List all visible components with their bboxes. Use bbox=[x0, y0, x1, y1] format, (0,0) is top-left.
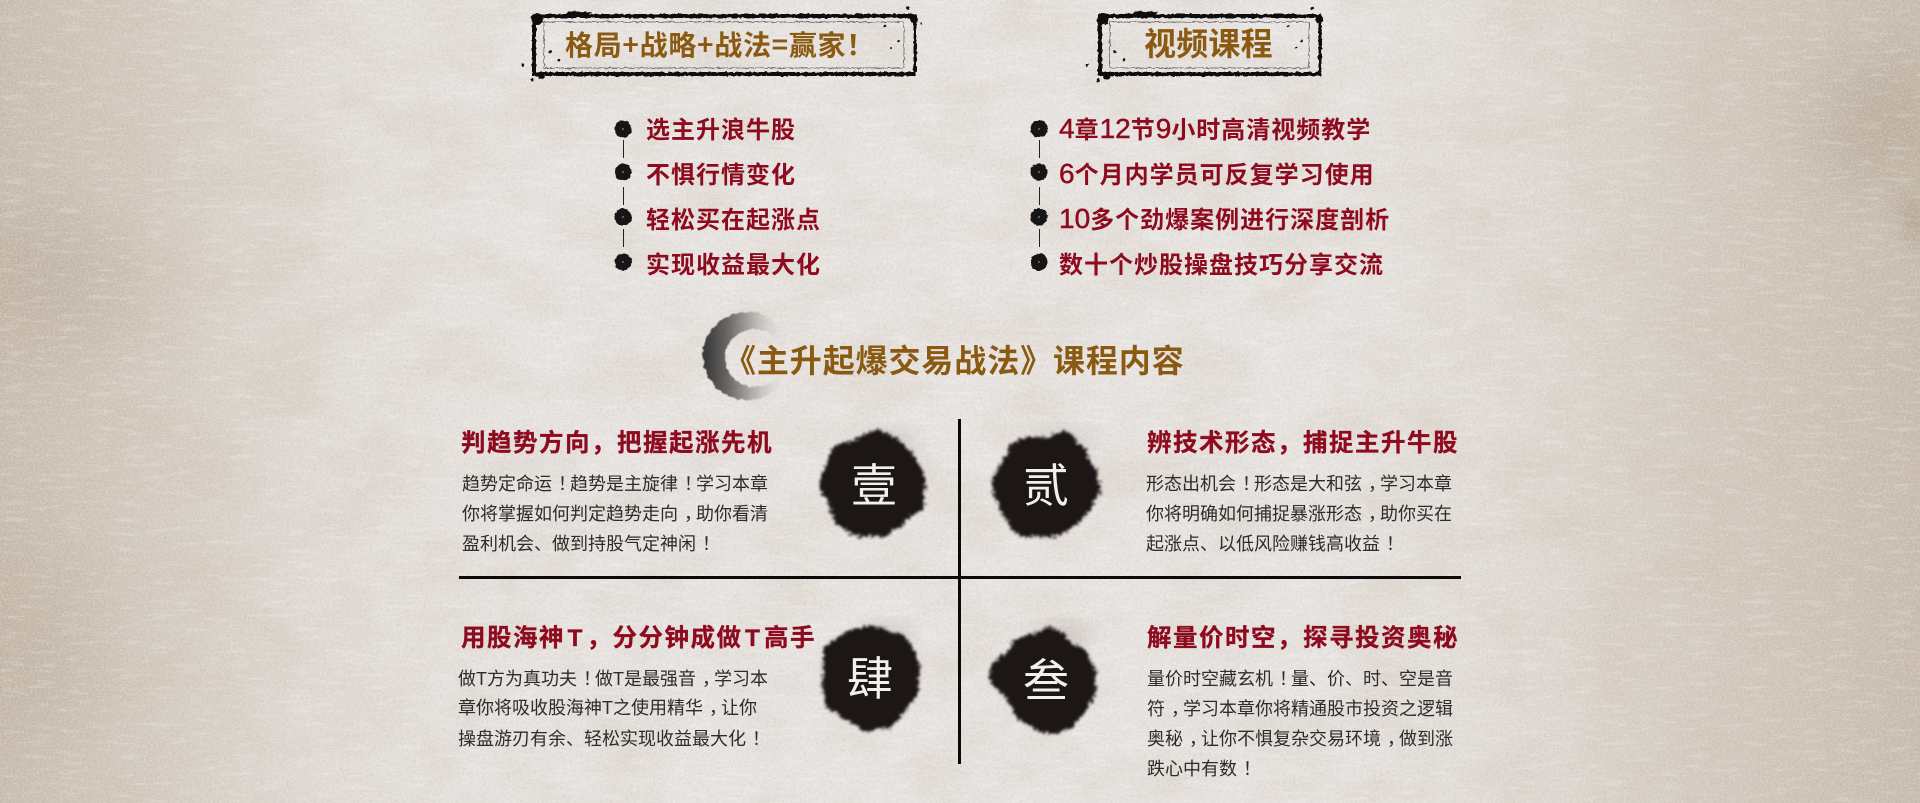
panel: chapter 3 bbox=[994, 624, 1459, 779]
panel: chapter 4: 章你将吸收股海神T之使用精华 ，让你 bbox=[458, 698, 757, 718]
panel: chapter 4: 用股海神T，分分钟成做T高手 bbox=[461, 624, 816, 652]
panel: chapter 3: 解量价时空，探寻投资奥秘 bbox=[1147, 624, 1459, 652]
frame heading: 格局+战略+战法=赢家: 格局+战略+战法=赢家！ bbox=[565, 24, 875, 64]
list: benefits: 选主升浪牛股 bbox=[646, 117, 796, 144]
icon: ink blob 壹: 壹 bbox=[851, 460, 897, 512]
list: benefits bbox=[614, 117, 821, 279]
list: video course: 4章12节9小时高清视频教学 bbox=[1059, 113, 1371, 144]
panel: chapter 2: 形态出机会 ！形态是大和弦 ，学习本章 bbox=[1146, 474, 1452, 494]
list: benefits: 实现收益最大化 bbox=[646, 252, 821, 279]
list: video course bbox=[1030, 113, 1390, 279]
panel: chapter 3: 奥秘 ，让你不惧复杂交易环境 ，做到涨 bbox=[1147, 729, 1453, 749]
panel: chapter 2: 辨技术形态，捕捉主升牛股 bbox=[1147, 429, 1459, 457]
section title: 《主升起爆交易战法》课程内容 bbox=[724, 336, 1185, 382]
list: benefits: 不惧行情变化 bbox=[646, 161, 796, 189]
panel: chapter 3: 量价时空藏玄机 ！量、价、时、空是音 bbox=[1147, 669, 1453, 689]
panel: chapter 2: 你将明确如何捕捉暴涨形态 ，助你买在 bbox=[1146, 504, 1452, 524]
icon: ink blob 肆: 肆 bbox=[847, 653, 893, 705]
icon: ink blob 肆 bbox=[819, 625, 921, 729]
icon: ink blob 叁 bbox=[994, 627, 1096, 731]
panel: chapter 1 bbox=[461, 428, 924, 554]
panel: chapter 2: 起涨点、以低风险赚钱高收益 ！ bbox=[1146, 534, 1404, 554]
frame heading: 格局+战略+战法=赢家 bbox=[522, 6, 922, 82]
frame heading: 视频课程: 视频课程 bbox=[1144, 19, 1273, 65]
panel: chapter 1: 盈利机会、做到持股气定神闲 ！ bbox=[462, 534, 720, 554]
panel: chapter 4: 操盘游刃有余、轻松实现收益最大化 ！ bbox=[458, 729, 770, 749]
cross divider bbox=[459, 419, 1461, 764]
panel: chapter 3: 跌心中有数 ！ bbox=[1147, 759, 1261, 779]
icon: ink blob 贰 bbox=[994, 432, 1096, 536]
icon: ink blob 壹 bbox=[822, 432, 924, 536]
panel: chapter 4 bbox=[458, 624, 921, 749]
icon: ink blob 贰: 贰 bbox=[1023, 460, 1069, 512]
list: video course: 数十个炒股操盘技巧分享交流 bbox=[1059, 251, 1384, 279]
list: benefits: 轻松买在起涨点 bbox=[646, 207, 821, 234]
frame heading: 视频课程 bbox=[1086, 6, 1323, 82]
panel: chapter 4: 做T方为真功夫 ！做T是最强音 ，学习本 bbox=[458, 669, 768, 689]
icon: ink ring bbox=[703, 312, 791, 400]
panel: chapter 2 bbox=[994, 429, 1459, 554]
panel: chapter 1: 你将掌握如何判定趋势走向 ，助你看清 bbox=[462, 504, 768, 524]
icon: ink blob 叁: 叁 bbox=[1023, 655, 1069, 707]
panel: chapter 3: 符 ，学习本章你将精通股市投资之逻辑 bbox=[1147, 699, 1453, 719]
panel: chapter 1: 判趋势方向，把握起涨先机 bbox=[461, 428, 773, 457]
list: video course: 10多个劲爆案例进行深度剖析 bbox=[1059, 203, 1390, 234]
panel: chapter 1: 趋势定命运 ！趋势是主旋律 ！学习本章 bbox=[462, 474, 768, 494]
list: video course: 6个月内学员可反复学习使用 bbox=[1059, 158, 1375, 189]
